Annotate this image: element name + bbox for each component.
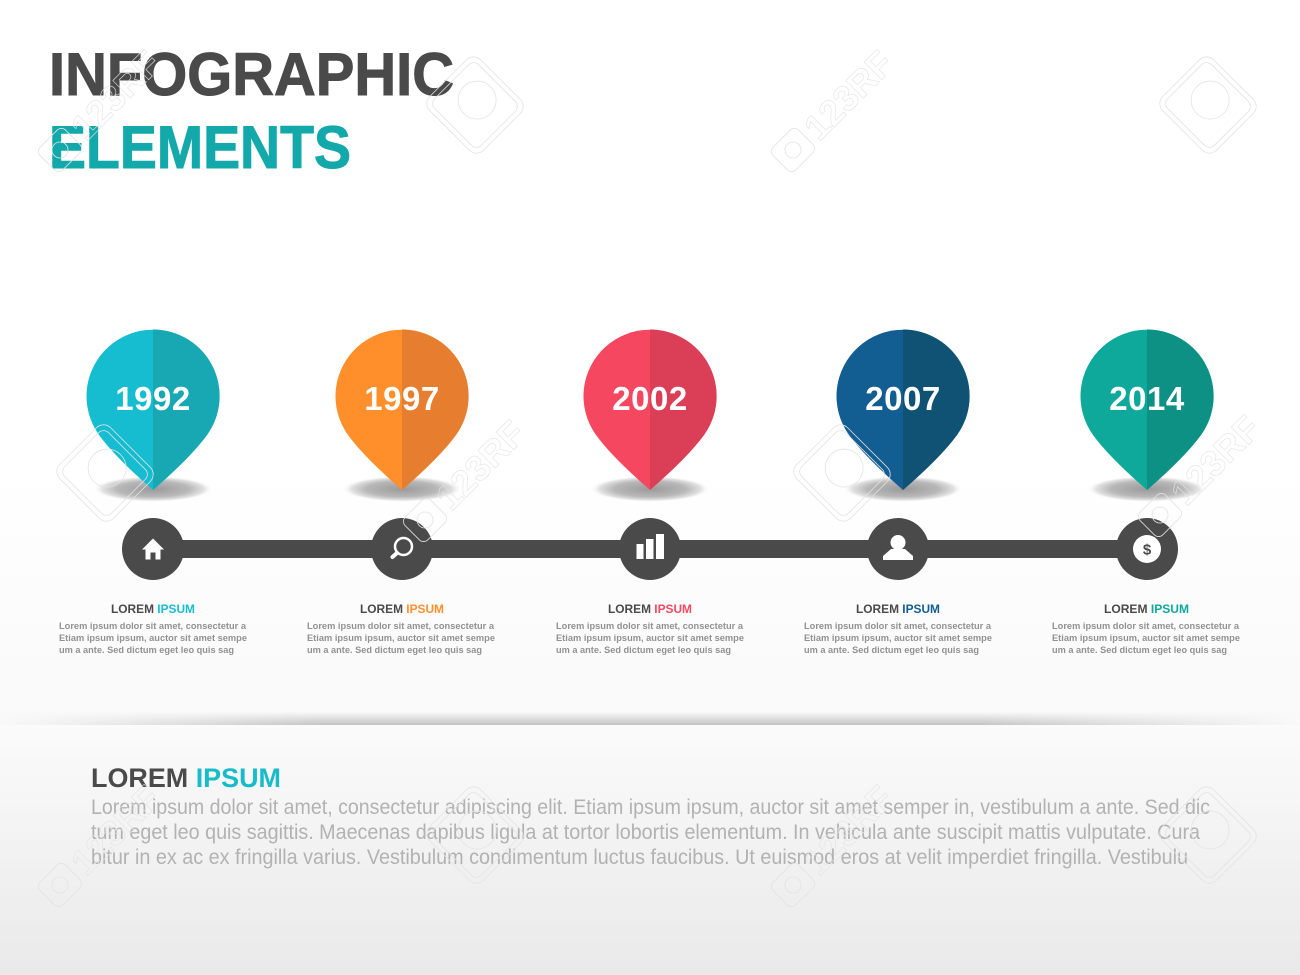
watermarks: 123RF bbox=[63, 777, 168, 883]
marker: 2014: 2014 bbox=[1109, 380, 1185, 417]
text block: step 3: LOREM IPSUM bbox=[608, 602, 692, 616]
icon: dollar coin: $ bbox=[1143, 542, 1152, 558]
marker: 2014 bbox=[1080, 329, 1214, 502]
text block: step 5: um a ante. Sed dictum eget leo quis sag bbox=[1052, 645, 1227, 656]
text block: step 4: um a ante. Sed dictum eget leo quis sag bbox=[804, 645, 979, 656]
text block: step 1 bbox=[59, 602, 247, 656]
text block: step 2 bbox=[307, 602, 495, 656]
panel: footer background bbox=[0, 712, 1300, 975]
icon: bar chart bbox=[619, 518, 681, 580]
text block: step 2: Lorem ipsum dolor sit amet, consectetur a bbox=[307, 621, 495, 632]
text block: step 2: LOREM IPSUM bbox=[360, 602, 444, 616]
text block: step 5: Etiam ipsum ipsum, auctor sit amet sempe bbox=[1052, 633, 1240, 644]
text block: step 3: um a ante. Sed dictum eget leo quis sag bbox=[556, 645, 731, 656]
text block: step 5: Lorem ipsum dolor sit amet, consectetur a bbox=[1052, 621, 1240, 632]
text block: step 4: Lorem ipsum dolor sit amet, consectetur a bbox=[804, 621, 992, 632]
text block: step 3: Etiam ipsum ipsum, auctor sit amet sempe bbox=[556, 633, 744, 644]
timeline bar bbox=[153, 540, 1147, 558]
watermarks: 123RF bbox=[63, 42, 168, 148]
text block: step 1: LOREM IPSUM bbox=[111, 602, 195, 616]
text block: step 1: Etiam ipsum ipsum, auctor sit amet sempe bbox=[59, 633, 247, 644]
text block: step 1: Lorem ipsum dolor sit amet, consectetur a bbox=[59, 621, 247, 632]
icon: home bbox=[122, 518, 184, 580]
icon: magnifier bbox=[371, 518, 433, 580]
marker: 2002 bbox=[584, 329, 717, 502]
text block: step 5 bbox=[1052, 602, 1240, 656]
title bbox=[49, 41, 454, 181]
text block: step 1: um a ante. Sed dictum eget leo quis sag bbox=[59, 645, 234, 656]
watermarks: 123RF bbox=[1163, 407, 1268, 513]
icon: person bbox=[867, 518, 929, 580]
marker: 2007 bbox=[836, 329, 970, 502]
text block: step 4: Etiam ipsum ipsum, auctor sit amet sempe bbox=[804, 633, 992, 644]
marker: 1992 bbox=[86, 329, 220, 502]
footer paragraph bbox=[91, 796, 1210, 869]
marker: 2007: 2007 bbox=[865, 380, 941, 417]
text block: step 3: Lorem ipsum dolor sit amet, consectetur a bbox=[556, 621, 744, 632]
text block: step 4: LOREM IPSUM bbox=[856, 602, 940, 616]
marker: 1997: 1997 bbox=[364, 380, 440, 417]
footer paragraph: bitur in ex ac ex fringilla varius. Vestibulum condimentum luctus faucibus. Ut euismod eros at velit imperdiet fringilla. Vestibulu bbox=[91, 846, 1188, 869]
text block: step 3 bbox=[556, 602, 744, 656]
icon: dollar coin bbox=[1116, 518, 1178, 580]
title: ELEMENTS bbox=[49, 114, 351, 181]
text block: step 4 bbox=[804, 602, 992, 656]
footer paragraph: tum eget leo quis sagittis. Maecenas dapibus ligula at tortor lobortis elementum. In vehicula ante suscipit mattis vulputate. Cura bbox=[91, 821, 1200, 844]
watermarks: 123RF bbox=[796, 777, 901, 883]
text block: step 2: um a ante. Sed dictum eget leo quis sag bbox=[307, 645, 482, 656]
title: INFOGRAPHIC bbox=[49, 41, 454, 108]
watermarks: 123RF bbox=[796, 42, 901, 148]
text block: step 2: Etiam ipsum ipsum, auctor sit amet sempe bbox=[307, 633, 495, 644]
marker: 1997 bbox=[335, 329, 469, 502]
footer heading: LOREM IPSUM bbox=[91, 763, 281, 793]
page background bbox=[0, 0, 1300, 725]
marker: 2002: 2002 bbox=[612, 380, 688, 417]
footer paragraph: Lorem ipsum dolor sit amet, consectetur adipiscing elit. Etiam ipsum ipsum, auctor sit amet semper in, vestibulum a ante. Sed dic bbox=[91, 796, 1210, 819]
watermarks: 123RF bbox=[428, 412, 533, 518]
text block: step 5: LOREM IPSUM bbox=[1104, 602, 1189, 616]
marker: 1992: 1992 bbox=[115, 380, 191, 417]
